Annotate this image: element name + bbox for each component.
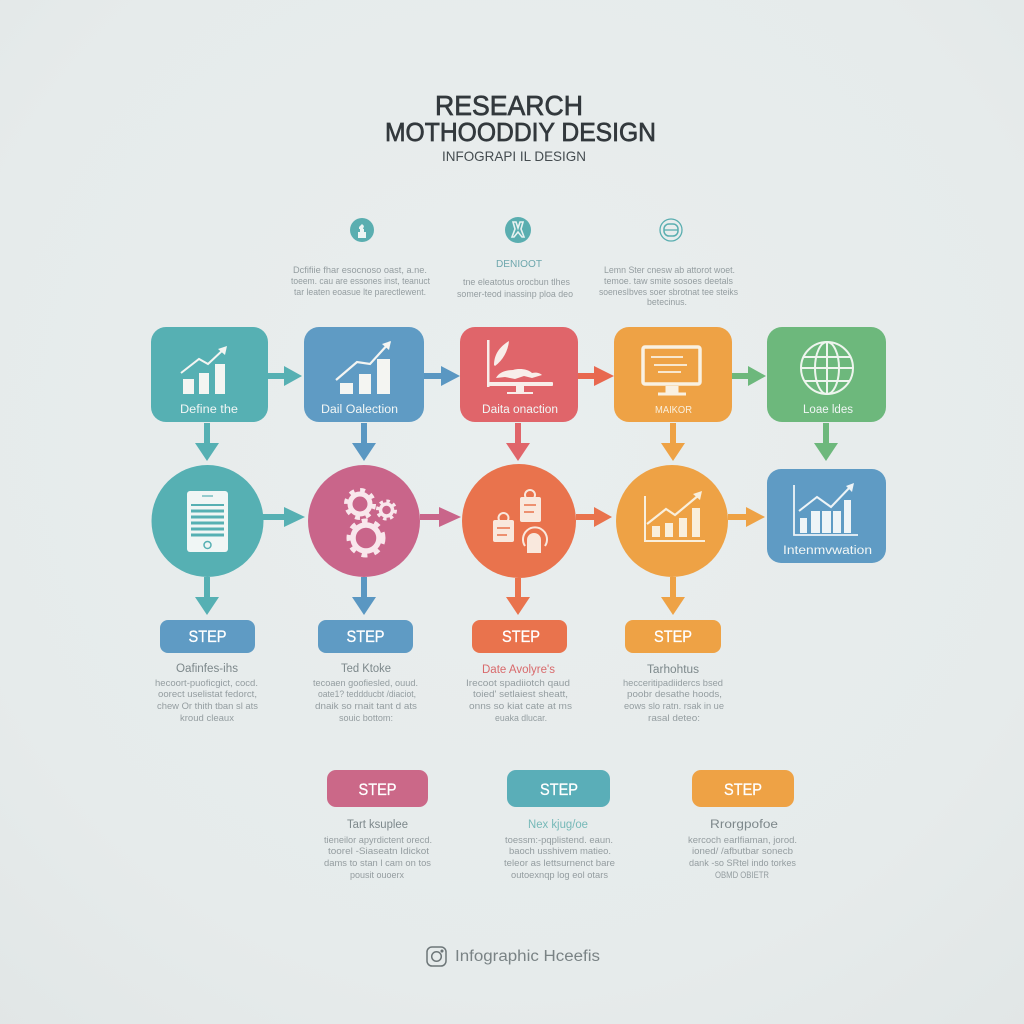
step card 7: OBMD OBIETR: [715, 870, 769, 881]
step card 3: onns so kiat cate at ms: [469, 701, 572, 712]
step card 5: STEP: [358, 781, 396, 799]
step card 1: Oafinfes-ihs: [176, 663, 238, 675]
icon: chart: [794, 483, 858, 535]
step card 2: STEP: [346, 628, 384, 646]
step card 3: Date Avolyre's: [482, 664, 555, 676]
panel: globe: Loae ldes: [803, 404, 853, 416]
panel: define the: Define the: [180, 404, 238, 416]
icon: quill over monitor: [487, 340, 553, 394]
panel: data collection: Dail Oalection: [321, 404, 398, 416]
step card 5: dams to stan l cam on tos: [324, 858, 431, 869]
step card 2: tecoaen goofiesled, ouud.: [313, 678, 418, 689]
text block: top right: soenesIbves soer sbrotnat tee steiks: [599, 287, 738, 298]
text block: top left: Dcfifiie fhar esocnoso oast, a.ne.: [293, 265, 427, 276]
step card 7: ioned/ /afbutbar sonecb: [692, 846, 793, 857]
step card 6: Nex kjug/oe: [528, 819, 588, 831]
panel: data analysis: [460, 327, 578, 422]
panel: globe: [767, 327, 886, 422]
title: RESEARCH: [435, 90, 583, 121]
step card 3: [466, 620, 572, 724]
panel: phone circle: [152, 465, 264, 577]
text block: top left: tar leaten eoasue lte parectlewent.: [294, 287, 426, 298]
text block: top left: [291, 265, 430, 298]
step card 3: euaka dlucar.: [495, 713, 547, 724]
step card 2: [313, 620, 418, 724]
step card 6: outoexnqp log eol otars: [511, 870, 608, 881]
panel: define the: [151, 327, 268, 422]
step card 7: dank -so SRtel indo torkes: [689, 858, 796, 869]
step card 4: Tarhohtus: [647, 664, 699, 676]
step card 6: teleor as lettsurnenct bare: [504, 858, 615, 869]
step card 1: hecoort-puoficgict, cocd.: [155, 678, 258, 689]
panel: data analysis: Daita onaction: [482, 404, 558, 416]
step card 2: souic bottom:: [339, 713, 393, 724]
arrows: top row vertical: [195, 423, 838, 461]
panel: monitor: [614, 327, 732, 422]
text block: top left: toeem. cau are essones inst, teanuct: [291, 276, 430, 287]
step card 1: oorect uselistat fedorct,: [158, 689, 257, 700]
panel: monitor: MAIKOR: [655, 404, 692, 416]
panel: intervention: Intenmvwation: [783, 545, 872, 557]
icon: rising bar chart: [181, 346, 227, 394]
panel: data collection: [304, 327, 424, 422]
text block: top right: [599, 265, 738, 308]
title: [385, 90, 656, 164]
text block: top centre: tne eleatotus orocbun tlhes: [463, 277, 570, 288]
arrows: bottom row vertical: [195, 577, 685, 615]
title: INFOGRAPI IL DESIGN: [442, 148, 586, 164]
step card 5: tieneilor apyrdictent orecd.: [324, 835, 432, 846]
text block: top right: Lemn Ster cnesw ab attorot woet.: [604, 265, 735, 276]
step card 4: [623, 620, 724, 724]
icon: tags and arch: [493, 490, 547, 553]
icon: top right database badge: [660, 219, 682, 241]
panel: tags circle: [462, 464, 576, 578]
panel: chart circle: [616, 465, 728, 577]
step card 2: dnaik so rnait tant d ats: [315, 701, 417, 712]
step card 5: pousit ouoerx: [350, 870, 404, 881]
text block: top centre: [457, 258, 573, 300]
step card 7: Rrorgpofoe: [710, 819, 778, 831]
step card 2: Ted Ktoke: [341, 663, 391, 675]
step card 1: chew Or thith tban sl ats: [157, 701, 258, 712]
step card 5: [324, 770, 432, 881]
step card 2: oate1? teddducbt /diaciot,: [318, 689, 416, 700]
step card 4: STEP: [654, 628, 692, 646]
step card 7: STEP: [724, 781, 762, 799]
icon: phone: [187, 491, 228, 552]
step card 7: kercoch earlfiaman, jorod.: [688, 835, 797, 846]
icon: top left badge: [350, 218, 374, 242]
icon: chart: [645, 491, 705, 541]
footer: [427, 947, 600, 966]
step card 3: Irecoot spadiiotch qaud: [466, 678, 570, 689]
icon: top centre badge: [505, 217, 531, 243]
step card 1: kroud cleaux: [180, 713, 234, 724]
title: MOTHOODDIY DESIGN: [385, 117, 656, 147]
icon: camera logo: [427, 947, 446, 966]
panel: intervention: [767, 469, 886, 563]
icon: gears: [346, 490, 396, 556]
text block: top centre: somer-teod inassinp ploa deo: [457, 289, 573, 300]
step card 4: eows slo ratn. rsak in ue: [624, 701, 724, 712]
icon: rising bar chart: [336, 341, 391, 394]
text block: top centre: DENIOOT: [496, 258, 543, 270]
step card 5: Tart ksuplee: [347, 819, 408, 831]
step card 1: [155, 620, 258, 724]
icon: monitor: [643, 347, 700, 394]
step card 4: rasal deteo:: [648, 713, 700, 724]
step card 6: toessm:-pqplistend. eaun.: [505, 835, 613, 846]
step card 1: STEP: [188, 628, 226, 646]
icon: globe: [801, 342, 853, 394]
panel: gears circle: [308, 465, 420, 577]
step card 3: STEP: [502, 628, 540, 646]
step card 4: poobr desathe hoods,: [627, 689, 722, 700]
footer: Infographic Hceefis: [455, 948, 600, 965]
text block: top right: betecinus.: [647, 297, 687, 308]
step card 6: [504, 770, 615, 881]
arrows: bottom row horizontal: [263, 507, 765, 527]
text block: top right: temoe. taw smite sosoes deetals: [604, 276, 733, 287]
step card 3: toied' setlaiest sheatt,: [473, 689, 568, 700]
step card 5: toorel -Siaseatn Idickot: [328, 846, 429, 857]
step card 6: STEP: [540, 781, 578, 799]
arrows: top row horizontal: [268, 366, 766, 386]
step card 4: hecceritipadiidercs bsed: [623, 678, 723, 689]
step card 7: [688, 770, 797, 881]
step card 6: baoch usshivem matieo.: [509, 846, 611, 857]
